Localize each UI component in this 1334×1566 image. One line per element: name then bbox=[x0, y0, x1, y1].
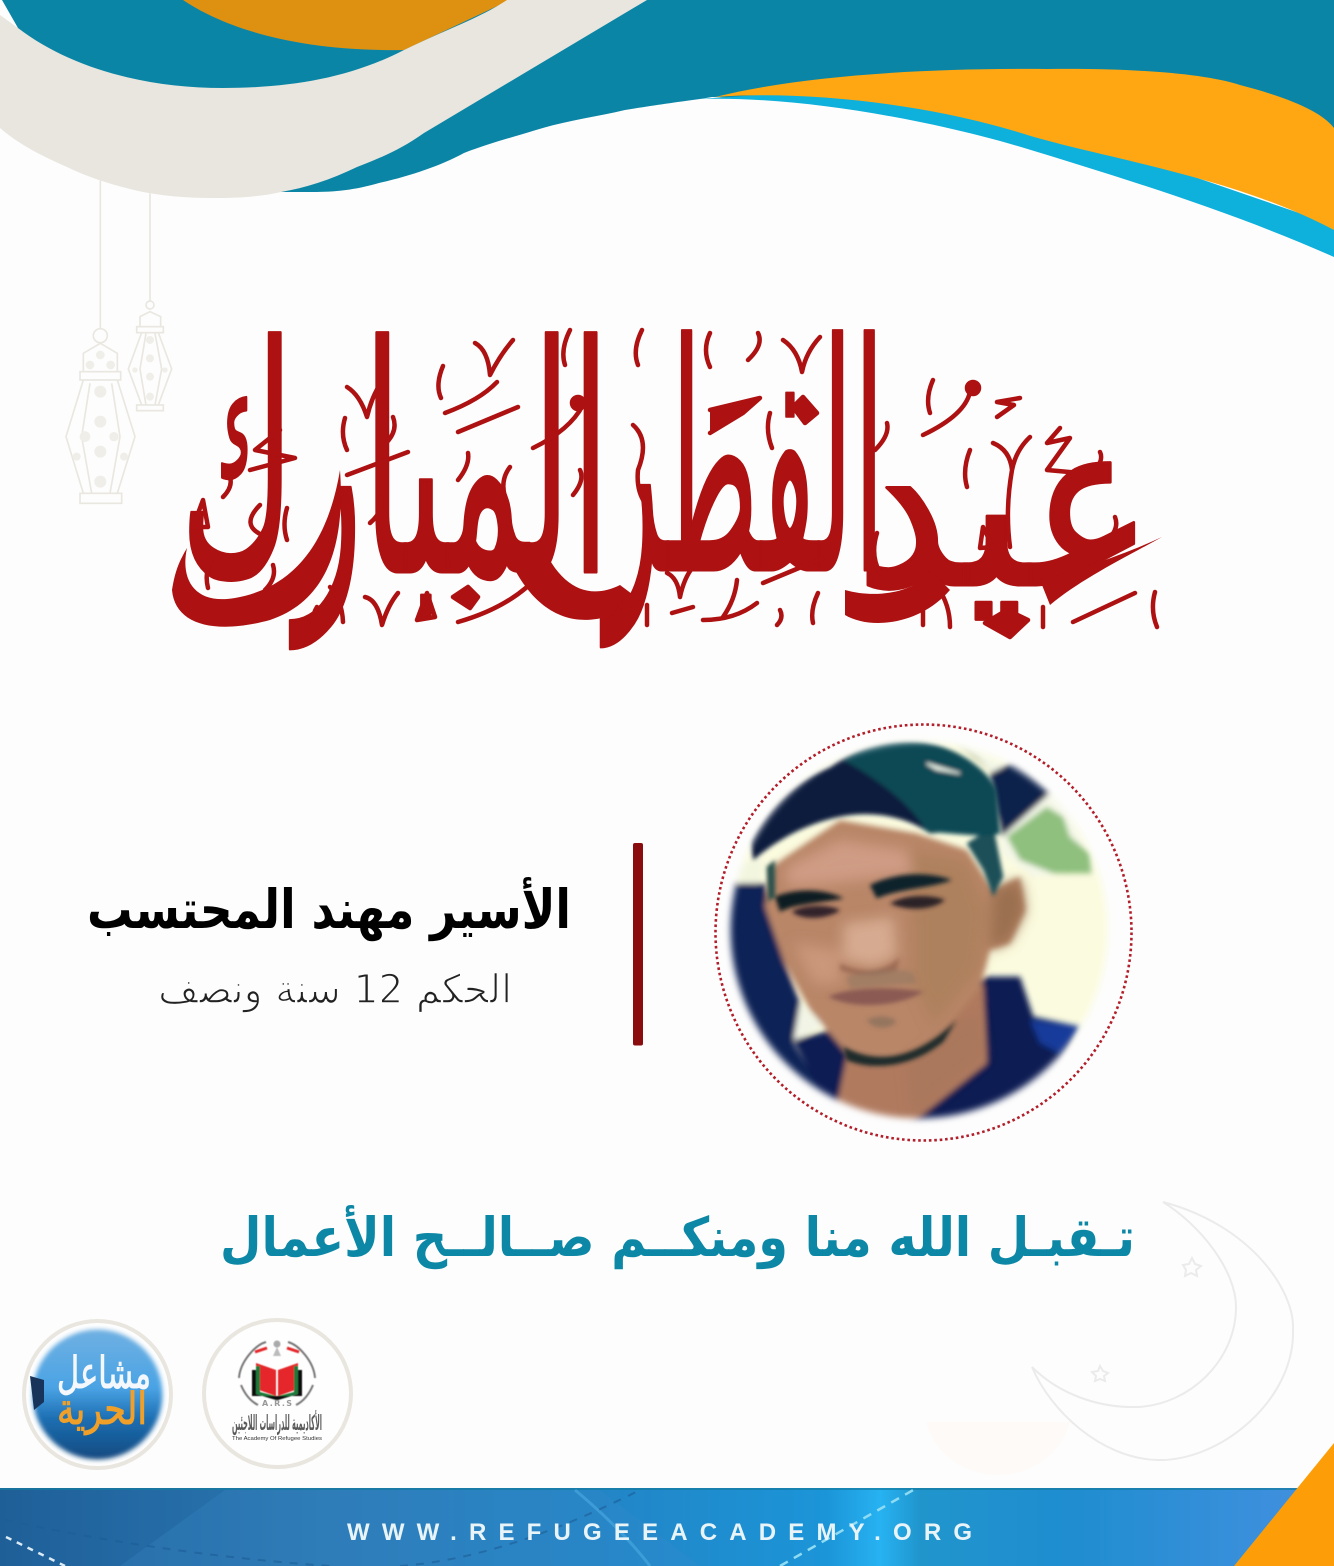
logo: academy of refugee studies: A.R.S bbox=[262, 1399, 292, 1408]
logo: academy of refugee studies bbox=[204, 1320, 351, 1467]
cream swoosh bbox=[0, 0, 647, 198]
face tones bbox=[912, 858, 990, 1014]
sky blue ribbon bbox=[700, 92, 1334, 257]
logo: freedom torches: مشاعل bbox=[57, 1348, 151, 1399]
closing greeting: تـقبـل الله منا ومنكــم صــالــح الأعمال bbox=[220, 1205, 1135, 1269]
orange ribbon bbox=[715, 69, 1334, 230]
top wave banner bbox=[0, 0, 1334, 257]
small lantern bbox=[128, 193, 172, 411]
photo bbox=[720, 730, 1113, 1143]
divider bar bbox=[633, 843, 643, 1046]
book emblem bbox=[239, 1340, 315, 1405]
text: الأكاديمية للدراسات اللاجئين bbox=[232, 1409, 322, 1435]
neck bbox=[837, 983, 987, 1143]
nose shadow bbox=[840, 957, 900, 975]
eyebrows bbox=[775, 891, 843, 912]
website address: WWW.REFUGEEACADEMY.ORG bbox=[347, 1519, 972, 1546]
logo: academy of refugee studies: The Academy Of Refugee Studies bbox=[232, 1436, 322, 1442]
sentence: الحكم 12 سنة ونصف bbox=[158, 967, 512, 1013]
background foliage and olive top bbox=[970, 752, 1083, 874]
band swooshes bbox=[120, 1490, 700, 1566]
prisoner portrait bbox=[716, 724, 1132, 1143]
dark left shape bbox=[720, 880, 833, 1110]
cap bbox=[750, 741, 1000, 860]
shirt bbox=[793, 977, 1080, 1143]
beard bbox=[843, 1020, 957, 1066]
prisoner name: الأسير مهند المحتسب bbox=[87, 877, 571, 941]
green hair side bbox=[967, 827, 1003, 897]
calligraphy ornamental marks bbox=[193, 330, 1157, 637]
footer band bbox=[0, 1443, 1334, 1566]
mustache and mouth bbox=[847, 970, 917, 988]
dashed lines bbox=[780, 1489, 915, 1566]
eyes bbox=[792, 906, 840, 918]
calligraphy swashes bbox=[172, 470, 1162, 627]
dotted ring bbox=[716, 724, 1132, 1140]
logo: freedom torches: الحرية bbox=[57, 1384, 147, 1435]
title calligraphy: Eid al-Fitr: المبارك bbox=[180, 281, 610, 651]
hanging lanterns bbox=[66, 180, 172, 503]
crescent watermark bbox=[926, 1202, 1293, 1475]
logo: freedom torches bbox=[24, 1321, 171, 1468]
dark orange wedge bbox=[183, 0, 510, 50]
large lantern bbox=[66, 180, 135, 503]
title calligraphy: Eid al-Fitr: عيد bbox=[855, 368, 1155, 641]
face bbox=[765, 820, 1025, 1063]
orange corner bbox=[1234, 1443, 1334, 1566]
dark block behind head bbox=[990, 760, 1053, 837]
teal wave bbox=[2, 0, 1334, 192]
